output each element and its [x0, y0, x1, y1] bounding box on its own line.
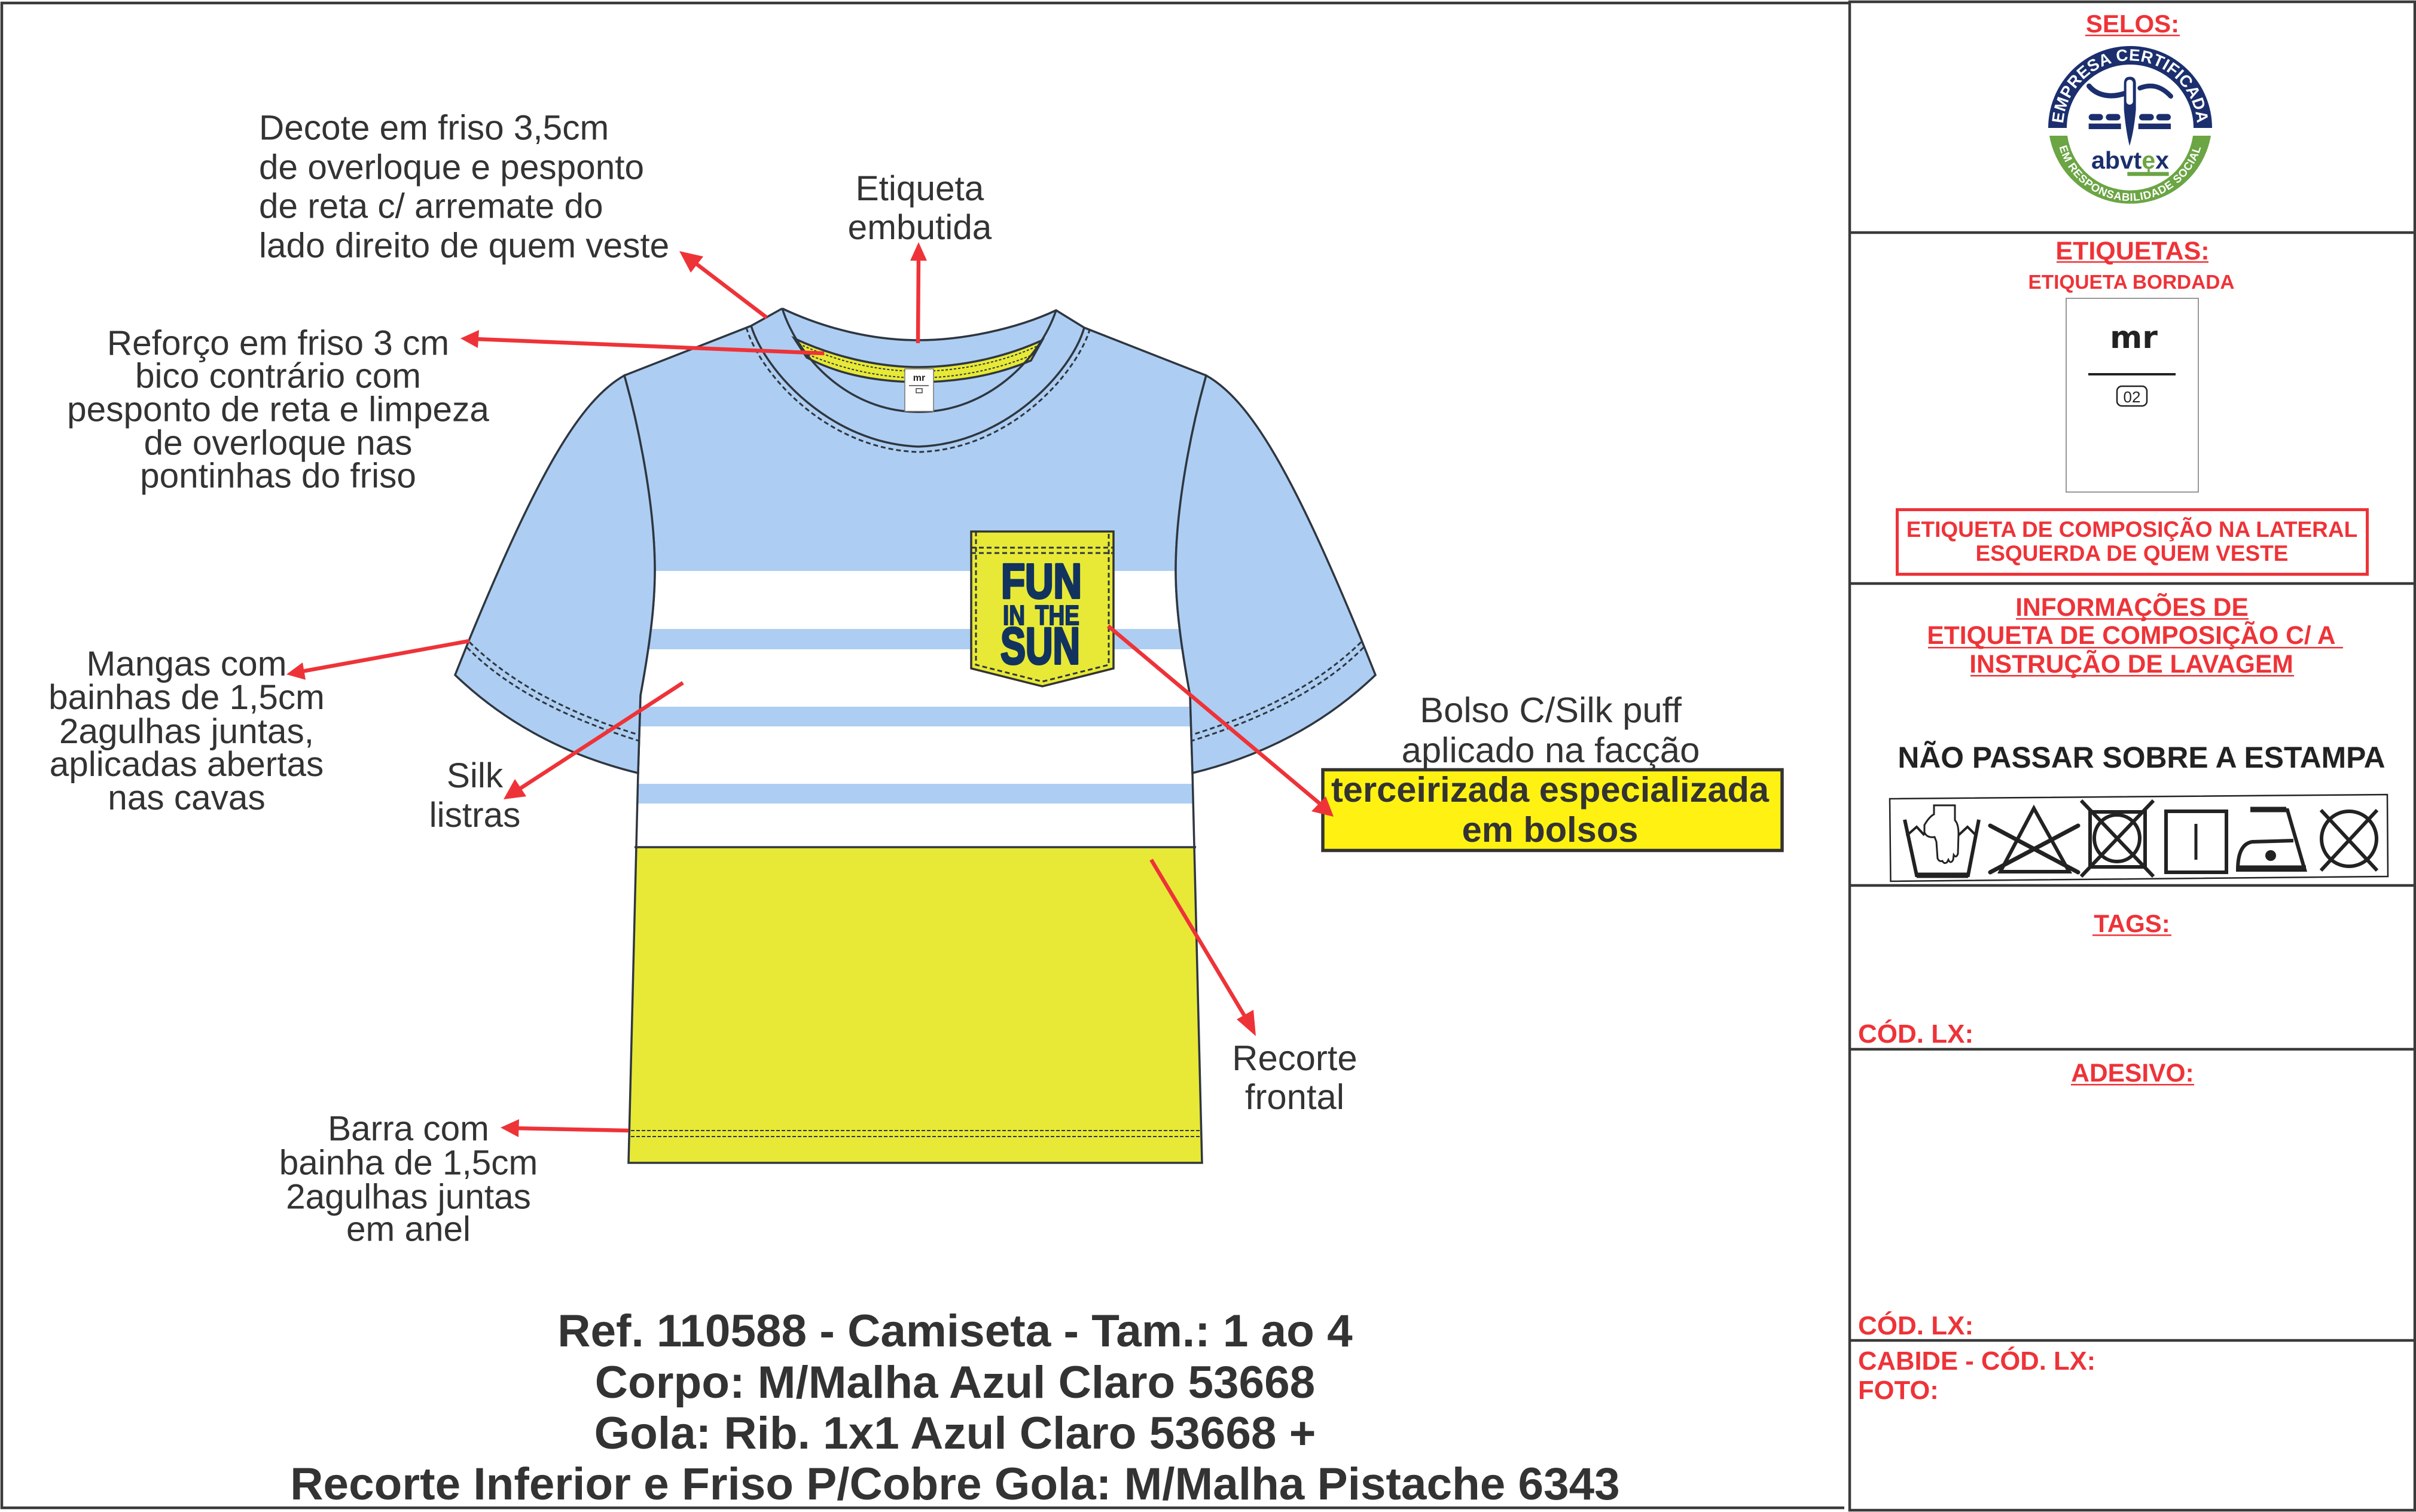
- heading: composition label information: INSTRUÇÃO DE LAVAGEM: [1969, 650, 2293, 679]
- highlighted callout: bolsos: em bolsos: [1462, 810, 1638, 850]
- heading: composition label information: [1927, 592, 2343, 679]
- callout: reforço: [67, 324, 489, 495]
- callout: etiqueta embutida: embutida: [848, 208, 992, 247]
- right sleeve: [1176, 375, 1375, 773]
- callout: mangas: 2agulhas juntas,: [59, 712, 314, 751]
- callout: reforço: Reforço em friso 3 cm: [107, 324, 449, 362]
- callout: decote: de reta c/ arremate do: [259, 187, 603, 226]
- icon: abvtex seal: [2048, 46, 2212, 204]
- callout: silk listras: listras: [429, 796, 520, 835]
- callout: barra: bainha de 1,5cm: [279, 1143, 538, 1183]
- callout: etiqueta embutida: [848, 169, 992, 247]
- callout: recorte frontal: [1232, 1038, 1358, 1117]
- product title block: Recorte Inferior e Friso P/Cobre Gola: M/Malha Pistache 6343: [290, 1459, 1620, 1510]
- callout: decote: Decote em friso 3,5cm: [259, 109, 609, 147]
- panel: adesivo: [1858, 1059, 2194, 1340]
- print: fun in the sun: FUN: [1001, 554, 1082, 609]
- callout: reforço: de overloque nas: [144, 423, 412, 463]
- callout: mangas: bainhas de 1,5cm: [48, 678, 325, 717]
- callout: mangas: [48, 644, 325, 817]
- arrow: mangas: [286, 641, 469, 680]
- embroidered label: [2066, 298, 2198, 492]
- panel: cabide and foto: CABIDE - CÓD. LX:: [1858, 1346, 2095, 1376]
- icon: no bleach: [1990, 808, 2078, 872]
- callout: decote: de overloque e pesponto: [259, 148, 644, 187]
- right column frame: [1850, 2, 2415, 1510]
- icon: hand wash: [1905, 805, 1979, 875]
- warning text: NÃO PASSAR SOBRE A ESTAMPA: [1898, 741, 2386, 774]
- callout: bolso: Bolso C/Silk puff: [1420, 690, 1682, 730]
- panel: cabide and foto: [1858, 1346, 2095, 1405]
- highlighted callout: bolsos: terceirizada especializada: [1331, 769, 1770, 810]
- callout: decote: [259, 109, 669, 265]
- arrow: recorte: [1151, 860, 1256, 1036]
- arrow: reforço: [460, 330, 824, 353]
- callout: barra: Barra com: [328, 1110, 489, 1148]
- heading: tags: TAGS:: [2094, 909, 2170, 937]
- callout: reforço: pontinhas do friso: [140, 457, 416, 495]
- heading: composition label information: INFORMAÇÕES DE: [2015, 592, 2249, 622]
- callout: composition label position: ESQUERDA DE QUEM VESTE: [1976, 541, 2288, 566]
- icon: no tumble dry: [2081, 801, 2153, 876]
- callout: bolso: [1402, 690, 1700, 770]
- embroidered label: mr: [2110, 320, 2158, 356]
- embroidered label: 02: [2124, 388, 2140, 406]
- heading: adesivo: ADESIVO:: [2071, 1059, 2194, 1088]
- icon: abvtex seal: EM RESPONSABILIDADE SOCIAL: [2060, 145, 2201, 201]
- heading: selos: SELOS:: [2086, 10, 2179, 38]
- heading: composition label information: ETIQUETA DE COMPOSIÇÃO C/ A: [1927, 621, 2336, 650]
- arrow: etiqueta: [910, 242, 927, 343]
- callout: mangas: nas cavas: [108, 778, 266, 817]
- product title block: Gola: Rib. 1x1 Azul Claro 53668 +: [594, 1408, 1316, 1459]
- callout: barra: 2agulhas juntas: [286, 1178, 531, 1216]
- callout: composition label position: ETIQUETA DE COMPOSIÇÃO NA LATERAL: [1906, 517, 2357, 542]
- callout: barra: em anel: [346, 1210, 471, 1248]
- arrow: bolso: [1108, 626, 1334, 817]
- callout: reforço: pesponto de reta e limpeza: [67, 390, 489, 429]
- arrow: silk: [504, 683, 683, 799]
- code label: adesivo: CÓD. LX:: [1858, 1311, 1973, 1340]
- callout: barra: [279, 1110, 538, 1248]
- callout: silk listras: Silk: [447, 756, 504, 795]
- neck label: [905, 369, 934, 411]
- callout: mangas: aplicadas abertas: [50, 745, 324, 784]
- print: fun in the sun: IN THE: [1003, 600, 1079, 631]
- icon: line dry: [2166, 811, 2226, 872]
- callout: decote: lado direito de quem veste: [259, 226, 669, 265]
- neck label: mr: [913, 373, 925, 383]
- callout: bolso: aplicado na facção: [1402, 730, 1700, 770]
- main panel frame: [2, 3, 1850, 1508]
- panel: cabide and foto: FOTO:: [1858, 1376, 1939, 1405]
- panel: tags: [1858, 909, 2171, 1049]
- heading: etiquetas: ETIQUETAS:: [2055, 237, 2210, 265]
- print: fun in the sun: [1000, 554, 1082, 675]
- icon: abvtex seal: abvtex: [2091, 146, 2169, 174]
- icon: abvtex seal: EMPRESA CERTIFICADA: [2052, 49, 2208, 123]
- left sleeve: [455, 375, 655, 773]
- print: fun in the sun: SUN: [1000, 618, 1080, 675]
- callout: reforço: bico contrário com: [135, 356, 421, 396]
- product title block: Corpo: M/Malha Azul Claro 53668: [595, 1357, 1315, 1408]
- panel: selos: [2048, 10, 2212, 204]
- callout: etiqueta embutida: Etiqueta: [856, 169, 984, 208]
- callout: composition label position: [1897, 509, 2367, 574]
- arrow: barra: [501, 1119, 629, 1137]
- chest pocket with print: [971, 532, 1114, 686]
- code label: tags: CÓD. LX:: [1858, 1019, 1973, 1049]
- callout: mangas: Mangas com: [87, 644, 286, 683]
- arrow: decote: [679, 251, 767, 317]
- callout: silk listras: [429, 756, 520, 835]
- panel: informações de etiqueta: [1890, 592, 2388, 881]
- highlighted callout: bolsos: [1323, 769, 1782, 850]
- panel: etiquetas: [1897, 237, 2367, 574]
- collar and yellow neck binding: [746, 308, 1090, 452]
- callout: recorte frontal: Recorte: [1232, 1038, 1358, 1078]
- care symbols strip: [1890, 795, 2388, 881]
- product title block: [290, 1306, 1620, 1510]
- subheading: etiqueta bordada: ETIQUETA BORDADA: [2028, 271, 2235, 294]
- callout: recorte frontal: frontal: [1245, 1077, 1344, 1117]
- icon: iron low: [2238, 810, 2306, 870]
- product title block: Ref. 110588 - Camiseta - Tam.: 1 ao 4: [557, 1306, 1353, 1357]
- icon: no dry clean: [2321, 810, 2377, 870]
- t-shirt technical drawing: [455, 299, 1375, 1164]
- shirt body: [598, 299, 1232, 1164]
